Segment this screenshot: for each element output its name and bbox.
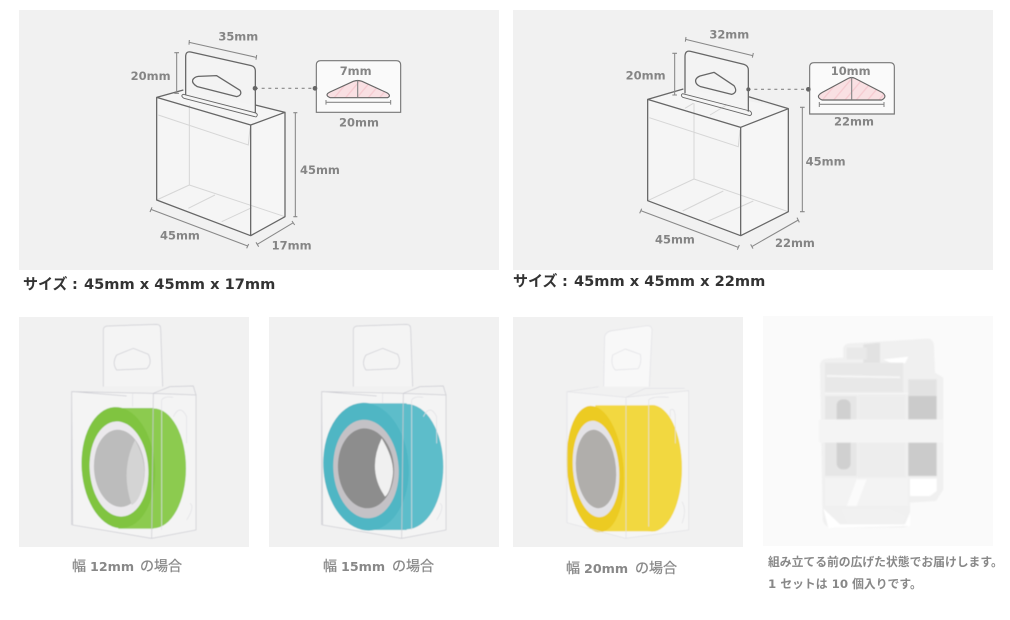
diagram: box with hanger, 22mm	[626, 27, 894, 250]
caption: 15mm: 15mm	[341, 559, 385, 574]
photo: blue tape in clear box	[319, 324, 446, 538]
diagram: box with hanger, 22mm: 45mm	[655, 232, 695, 246]
heading: size 22mm: :	[562, 273, 568, 290]
diagram: box with hanger, 22mm: 45mm	[806, 155, 846, 169]
note: flat delivery: 組み立てる前の広げた状態でお届けします。	[768, 555, 1003, 569]
diagram: box with hanger, 17mm: 35mm	[218, 30, 258, 44]
caption: 12mm: 幅	[72, 559, 86, 575]
caption: 20mm: 20mm	[584, 561, 628, 576]
diagram: box with hanger, 22mm: 20mm	[626, 68, 666, 82]
caption: 20mm: 幅	[566, 561, 580, 577]
panel: 22mm box diagram	[513, 10, 993, 270]
caption: 12mm: 12mm	[90, 559, 134, 574]
diagram: box with hanger, 17mm: 45mm	[160, 228, 200, 242]
diagram: box with hanger, 22mm: 22mm	[775, 236, 815, 250]
panel: blue tape photo	[269, 317, 499, 547]
heading: size 22mm: サイズ	[513, 272, 558, 290]
caption: 15mm: の場合	[392, 559, 434, 575]
inset: hanger hole 22mm x 10mm: 22mm	[834, 115, 874, 129]
panel: flat packs photo	[763, 316, 993, 546]
inset: hanger hole 20mm x 7mm: 7mm	[340, 64, 372, 78]
caption: 15mm: 幅	[323, 559, 337, 575]
heading: size 17mm: :	[72, 276, 78, 293]
diagram: box with hanger, 17mm	[131, 30, 401, 252]
caption: 12mm: の場合	[140, 559, 182, 575]
photo: stack of flat packs	[819, 339, 943, 528]
diagram: box with hanger, 17mm: 45mm	[300, 163, 340, 177]
photo: green tape in clear box	[72, 324, 196, 538]
diagram: box with hanger, 17mm: 17mm	[272, 238, 312, 252]
inset: hanger hole 22mm x 10mm	[810, 63, 894, 129]
note: set quantity: 1 セットは 10 個入りです。	[768, 577, 922, 591]
heading: size 22mm: 45mm x 45mm x 22mm	[574, 273, 765, 290]
heading: size 17mm: 45mm x 45mm x 17mm	[84, 276, 275, 293]
inset: hanger hole 20mm x 7mm: 20mm	[339, 116, 379, 130]
photo: yellow tape in clear box	[562, 326, 689, 538]
diagram: box with hanger, 22mm: 32mm	[709, 27, 749, 41]
panel: yellow tape photo	[513, 317, 743, 547]
diagram: box with hanger, 17mm: 20mm	[131, 69, 171, 83]
caption: 20mm: の場合	[635, 561, 677, 577]
inset: hanger hole 20mm x 7mm	[316, 61, 401, 130]
panel: 17mm box diagram	[19, 10, 499, 270]
heading: size 17mm: サイズ	[23, 275, 68, 293]
panel: green tape photo	[19, 317, 249, 547]
inset: hanger hole 22mm x 10mm: 10mm	[831, 64, 871, 78]
